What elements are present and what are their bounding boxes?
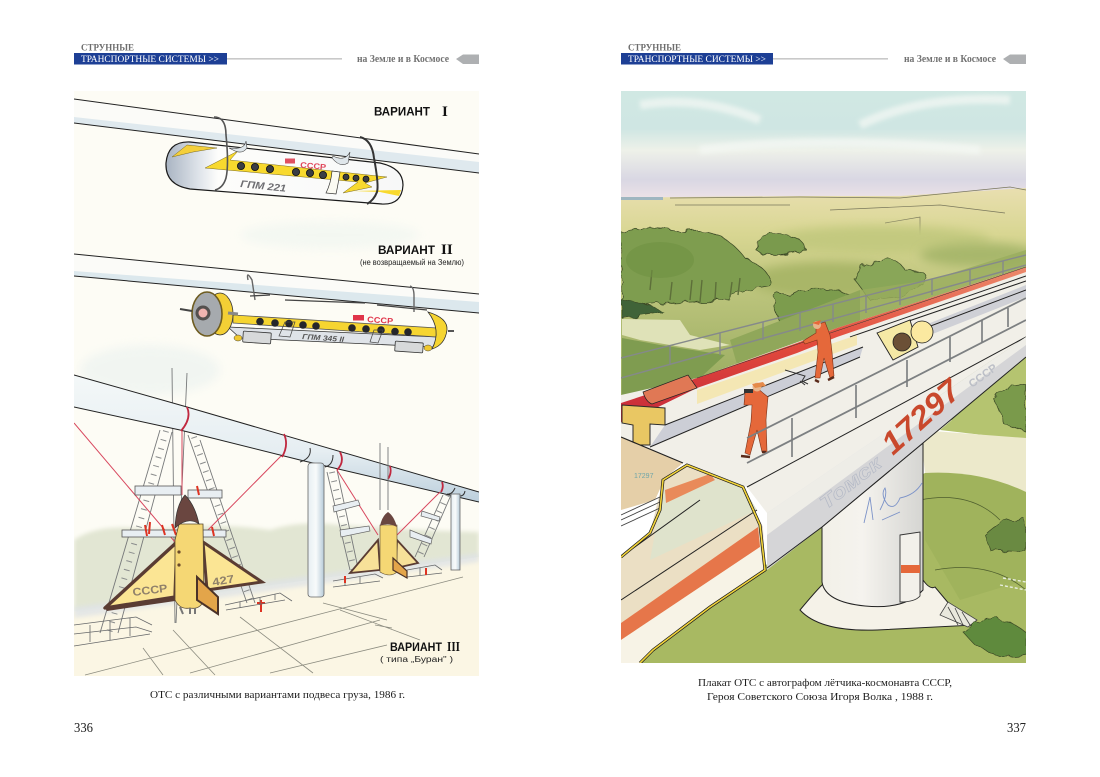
variant III scene <box>74 368 479 676</box>
landscape <box>621 187 1040 420</box>
autograph signature <box>864 483 922 523</box>
cutaway section with yellow outline <box>621 437 765 663</box>
caption left: ОТС с различными вариантами подвеса груза, 1986 г. <box>150 689 405 701</box>
panel: left illustration, load suspension variants <box>74 91 479 676</box>
variant I tube <box>74 99 479 173</box>
panel: right illustration, bridge poster <box>621 91 1040 663</box>
small distant shuttle and tower <box>327 443 451 583</box>
stairs <box>940 602 977 627</box>
header blue bar: ТРАНСПОРТНЫЕ СИСТЕМЫ >> <box>81 54 219 65</box>
bridge pier <box>800 443 977 630</box>
variant I capsule: ГПМ 221 <box>240 179 287 195</box>
large Buran-type shuttle <box>105 495 262 614</box>
header word: Струнные: СТРУННЫЕ <box>81 42 134 54</box>
overhead tube with supports <box>74 375 479 502</box>
near railing <box>747 298 1026 463</box>
header word: Струнные right: СТРУННЫЕ <box>628 42 681 54</box>
heading: variant II <box>360 244 464 266</box>
heading: variant III: III <box>447 640 460 655</box>
measuring instrument <box>785 370 808 385</box>
background forest wash <box>74 523 479 612</box>
marsh water <box>622 319 730 350</box>
sky <box>621 91 1026 199</box>
variant I capsule: СССР <box>300 161 327 172</box>
grey trough <box>650 347 863 447</box>
large Buran-type shuttle: СССР <box>132 583 168 599</box>
page number 336: 336 <box>74 720 93 735</box>
right ground and vegetation <box>621 357 1026 663</box>
variant II capsule <box>180 275 454 353</box>
heading: variant II: (не возвращаемый на Землю) <box>360 258 464 267</box>
header arrow tag right <box>1003 54 1026 64</box>
girder number 17297: 17297 <box>874 371 969 461</box>
girder ghost name: Томск <box>816 452 887 514</box>
red service pipe <box>621 267 1026 445</box>
T-beam support <box>622 405 665 445</box>
far railing <box>621 255 1026 378</box>
heading: variant I <box>374 106 448 116</box>
caption right <box>698 677 952 703</box>
variant II tube <box>74 254 479 313</box>
red workers <box>145 486 265 612</box>
bridge girder side face <box>767 337 1026 570</box>
heading: variant II: II <box>441 242 453 258</box>
figure: worker with binoculars <box>741 382 768 457</box>
platform railings <box>74 565 442 646</box>
ground plane <box>74 553 479 676</box>
figure: worker with pipe <box>803 320 834 382</box>
heading: variant III <box>380 642 460 664</box>
header subtitle right: на Земле и в Космосе <box>904 54 997 65</box>
variant II capsule: СССР <box>367 315 394 326</box>
right page header <box>621 42 1026 65</box>
trees <box>621 228 1026 395</box>
left launch tower <box>74 368 282 633</box>
heading: variant I: I <box>442 104 448 120</box>
inspection hatch <box>877 320 933 360</box>
girder mark СССР: СССР <box>967 362 1000 390</box>
header blue bar right: ТРАНСПОРТНЫЕ СИСТЕМЫ >> <box>628 54 766 65</box>
bridge deck <box>621 267 1026 513</box>
caption right: Героя Советского Союза Игоря Волка , 1988 г. <box>707 691 933 703</box>
cutaway section with yellow outline: 17297 <box>634 473 654 480</box>
header arrow tag <box>456 54 479 64</box>
foreground foliage <box>963 619 1026 657</box>
left page header <box>74 42 479 65</box>
page number 337: 337 <box>1007 720 1026 735</box>
variant II capsule: ГПМ 345 II <box>302 332 345 344</box>
heading: variant II: ВАРИАНТ <box>378 245 435 257</box>
heading: variant I: ВАРИАНТ <box>374 106 430 118</box>
heading: variant III: ( типа „Буран" ) <box>380 655 453 664</box>
large Buran-type shuttle: 427 <box>211 573 235 589</box>
support columns <box>308 463 460 597</box>
heading: variant III: ВАРИАНТ <box>390 642 442 654</box>
caption right: Плакат ОТС с автографом лётчика-космонавта СССР, <box>698 677 952 689</box>
variant I capsule <box>166 117 403 204</box>
header subtitle: на Земле и в Космосе <box>357 54 450 65</box>
